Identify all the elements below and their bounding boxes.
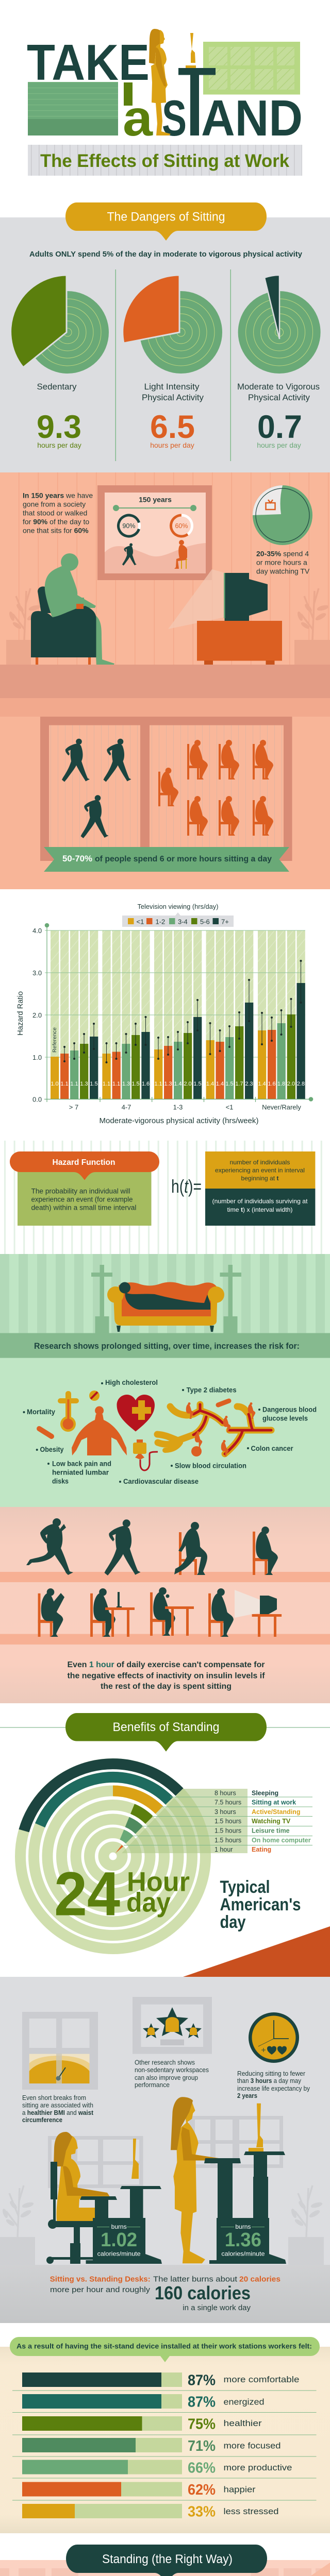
value labels: 2.0 [287, 1081, 295, 1087]
gridlines [45, 930, 305, 1057]
formula: h(t)= [171, 1176, 202, 1197]
ribbon: 50-70 percent [44, 847, 289, 872]
fraction box: time t) x (interval width) [227, 1206, 293, 1213]
risk list: Slow blood circulation [175, 1462, 246, 1469]
text: 150 years: for 90% of the day to [23, 517, 89, 526]
bars [51, 983, 305, 1099]
grave crosses [91, 1265, 241, 1333]
armchair with man [31, 553, 114, 665]
text: calories comparison: in a single work day [183, 2303, 251, 2312]
stat: light intensity [142, 382, 204, 449]
chart columns [51, 930, 305, 1099]
value labels: 1.3 [164, 1081, 172, 1087]
heading: 24 hour day [54, 1859, 190, 1929]
ribbon: 50-70 percent: 50-70% [62, 854, 92, 863]
window block [203, 42, 300, 95]
row: more productive: 66% [188, 2460, 216, 2476]
fraction box: (number of individuals surviving at [212, 1197, 308, 1205]
risk list: disks [52, 1478, 69, 1485]
panel: sit-stand survey [0, 2337, 330, 2533]
title word: a: a [123, 90, 154, 146]
x axis labels: > 7 [69, 1104, 78, 1111]
text: calories comparison [50, 2275, 280, 2312]
panel: benefits of standing [0, 1713, 330, 1977]
definition box [10, 1151, 159, 1226]
x axis labels: 4-7 [122, 1104, 131, 1111]
figure: watching tv [208, 1588, 282, 1637]
risk list: Colon cancer [251, 1445, 293, 1452]
text: group performance: can also improve group [135, 2074, 198, 2081]
section heading: benefits of standing [65, 1713, 267, 1752]
panel: exercise vs sitting [0, 1507, 330, 1703]
value labels: 1.7 [235, 1081, 243, 1087]
stat: standing calories: 1.36 [225, 2229, 261, 2251]
donut: 90 percent [116, 513, 142, 539]
text: calories comparison: The latter burns about [153, 2275, 238, 2283]
legend table [124, 1790, 312, 1853]
figure: running [26, 1518, 73, 1575]
stat: moderate to vigorous: hours per day [257, 441, 301, 449]
text: life expectancy: increase life expectancy by [237, 2085, 310, 2092]
television and stand [168, 569, 282, 665]
stat: light intensity: Light Intensity [144, 382, 200, 392]
sitting figures [158, 740, 273, 836]
row: more focused: 71% [188, 2438, 216, 2454]
stat: standing calories: burns [235, 2223, 251, 2230]
risk list: Low back pain and [52, 1460, 111, 1467]
window with figures [40, 717, 292, 861]
row: more productive [22, 2460, 292, 2476]
y axis labels: 4.0 [32, 927, 42, 935]
icon: capsule [39, 1429, 52, 1436]
risk list: Dangerous blood [262, 1405, 317, 1414]
section heading: standing the right way: Standing (the Right Way) [102, 2552, 233, 2566]
value labels: 1.5 [131, 1081, 140, 1087]
row: more focused [22, 2438, 280, 2454]
value labels: 1.8 [277, 1081, 285, 1087]
stat: moderate to vigorous [237, 382, 320, 449]
donut: 60 percent: 60% [175, 522, 188, 530]
value labels: 1.1 [70, 1081, 78, 1087]
figure: sitting [253, 1527, 278, 1575]
row: more comfortable [22, 2372, 299, 2388]
risk list: Obesity [40, 1446, 64, 1453]
stat: sedentary: hours per day [37, 441, 81, 449]
title word: Stand: S [162, 90, 187, 146]
figure: at computer [90, 1588, 135, 1637]
standing woman [171, 2097, 225, 2263]
definition box: Hazard Function [53, 1158, 116, 1167]
risk list: glucose levels [262, 1415, 308, 1422]
legend table: Sleeping [252, 1790, 278, 1797]
legend table: 3 hours [214, 1808, 236, 1816]
text: short breaks: circumference [22, 2116, 62, 2124]
row: healthier [22, 2416, 262, 2433]
intro sentence: Adults ONLY spend 5% of the day in moderate to vigorous physical activity [29, 250, 302, 259]
text: calories comparison: more per hour and roughly [50, 2285, 151, 2294]
text: group performance: performance [135, 2081, 170, 2089]
row: more comfortable: more comfortable [224, 2375, 299, 2384]
icon: orange body [72, 1406, 127, 1455]
legend table: Active/Standing [252, 1808, 300, 1816]
text: exercise can't compensate: the negative effects of inactivity on insulin levels if [67, 1671, 265, 1681]
panel: hazard function [0, 1141, 330, 1254]
stat: light intensity: hours per day [150, 441, 194, 449]
text: life expectancy: 2 years [237, 2092, 257, 2099]
background windows [48, 2116, 283, 2188]
woman at desk [149, 29, 196, 135]
value labels: 2.0 [184, 1081, 192, 1087]
value labels: 2.3 [245, 1081, 253, 1087]
text: life expectancy [237, 2070, 310, 2099]
heading: typical american's day: day [220, 1912, 246, 1932]
value labels: 2.8 [297, 1081, 305, 1087]
framed picture: 150 years [97, 485, 212, 580]
value labels: 1.4 [174, 1081, 182, 1087]
text: 150 years [23, 492, 93, 535]
donut: 60 percent [167, 511, 196, 540]
text: calories comparison: Sitting vs. Standing Desks: [50, 2275, 151, 2283]
legend table: On home computer [252, 1837, 311, 1844]
text: group performance [135, 2059, 209, 2089]
risk list [23, 1379, 317, 1485]
value labels: 1.1 [103, 1081, 110, 1087]
donut: 90 percent: 90% [122, 522, 136, 530]
standing desk frame [204, 2151, 286, 2264]
stat: sedentary: Sedentary [37, 382, 77, 392]
row: more focused: more focused [224, 2441, 280, 2450]
pie: moderate to vigorous [238, 275, 321, 374]
row: less stressed [22, 2504, 278, 2520]
fraction box [205, 1151, 315, 1226]
chart legend: <1 [136, 918, 144, 925]
x axis labels: <1 [226, 1104, 233, 1111]
icon: tv [266, 500, 275, 510]
heading: typical american's day: Typical [220, 1877, 270, 1897]
text: exercise can't compensate [67, 1660, 265, 1691]
value labels: 1.3 [80, 1081, 88, 1087]
figure: walking [104, 1519, 141, 1575]
text: calories comparison: 160 calories [155, 2282, 251, 2303]
definition box: death) within a small time interval [31, 1204, 136, 1212]
heading: typical american's day: American's [220, 1895, 301, 1914]
row: less stressed: 33% [188, 2504, 216, 2520]
error bars [64, 960, 302, 1063]
reference label: Reference [52, 1027, 58, 1053]
fraction box: experiencing an event in interval [215, 1166, 305, 1174]
text: life expectancy: Reducing sitting to fewer [237, 2070, 305, 2077]
plants [2, 2185, 323, 2237]
survey heading [10, 2337, 320, 2362]
stat: sedentary: 9.3 [37, 409, 81, 445]
stat: standing calories: calories/minute [221, 2250, 265, 2258]
value labels: 1.3 [122, 1081, 130, 1087]
x axis title: Moderate-vigorous physical activity (hrs/week) [99, 1116, 259, 1125]
row: healthier: healthier [224, 2418, 262, 2428]
stat: moderate to vigorous: Physical Activity [248, 393, 310, 402]
heading: 24 hour day: 24 [54, 1859, 120, 1929]
section heading: benefits of standing: Benefits of Standing [112, 1720, 220, 1734]
section heading: standing the right way [66, 2545, 267, 2576]
panel: dangers of sitting [0, 202, 330, 472]
legend table: 8 hours [214, 1790, 236, 1797]
value labels: 1.1 [60, 1081, 69, 1087]
title [27, 29, 303, 176]
stat: sedentary [37, 382, 81, 449]
row: less stressed: less stressed [224, 2506, 278, 2516]
icon: red capsule [218, 1401, 229, 1405]
value labels: 1.1 [112, 1081, 120, 1087]
risk list: High cholesterol [105, 1379, 158, 1386]
fraction box: number of individuals [230, 1159, 290, 1166]
man [45, 553, 114, 665]
value labels: 1.6 [142, 1081, 150, 1087]
scene: standing desk [171, 2097, 286, 2264]
panel: short breaks [22, 2012, 98, 2090]
row: happier: 62% [188, 2482, 216, 2498]
fraction box: beginning at t [241, 1175, 278, 1182]
stat: sitting calories [97, 2223, 141, 2258]
panel: standing the right way [0, 2545, 330, 2576]
chart legend [122, 903, 234, 927]
risk list: Type 2 diabetes [187, 1386, 237, 1394]
text: calories comparison: 20 calories [239, 2275, 280, 2283]
row: energized: energized [224, 2397, 264, 2407]
definition box: experience an event (for example [31, 1195, 133, 1204]
icon: arteries [157, 1404, 271, 1454]
heading: 24 hour day: day [126, 1888, 171, 1918]
stat: moderate to vigorous: Moderate to Vigorous [237, 382, 320, 392]
figure: rising from chair [174, 1522, 207, 1575]
panel: living room [0, 472, 330, 889]
pie: light intensity [123, 275, 222, 374]
chart legend: 3-4 [178, 918, 188, 925]
legend table: Watching TV [252, 1818, 291, 1825]
title word: TAKE: TAKE [27, 34, 150, 91]
legend table: 1.5 hours [214, 1837, 241, 1844]
monitor [256, 2104, 263, 2147]
sitting woman [54, 2132, 109, 2221]
figure: reading [38, 1588, 64, 1637]
title word: Stand [162, 68, 303, 146]
row: happier [22, 2482, 256, 2498]
legend table: Sitting at work [252, 1799, 296, 1806]
row: energized [22, 2394, 264, 2410]
radial chart: 24 hour day [21, 1764, 248, 1948]
row: healthier: 75% [188, 2416, 216, 2433]
chair [46, 2162, 95, 2264]
row: energized: 87% [188, 2394, 216, 2410]
figure: eating at table [150, 1587, 194, 1636]
subtitle band [28, 145, 302, 176]
stat: sitting calories: calories/minute [97, 2250, 141, 2258]
y axis labels: 3.0 [32, 969, 42, 977]
risk list: Mortality [27, 1408, 55, 1416]
y axis labels: 0.0 [32, 1095, 42, 1104]
risk list: herniated lumbar [52, 1468, 109, 1477]
legend table: 1.5 hours [214, 1827, 241, 1834]
icon: iv bag [133, 1439, 158, 1470]
value labels: 1.5 [225, 1081, 234, 1087]
bar chart: hazard ratio [16, 903, 313, 1125]
heading: typical american's day [220, 1877, 301, 1932]
icon: pill [89, 1391, 100, 1401]
text: tv watching [256, 549, 310, 575]
walking figures [62, 739, 131, 838]
panel: group performance [133, 1997, 212, 2054]
text: short breaks [22, 2094, 94, 2124]
value labels: 1.1 [154, 1081, 162, 1087]
value labels: 1.4 [216, 1081, 224, 1087]
survey heading: As a result of having the sit-stand device installed at their work stations workers felt: [16, 2342, 312, 2350]
text: 150 years: gone from a society [23, 500, 86, 508]
legend table: 1 hour [214, 1846, 233, 1853]
band: research shows: Research shows prolonged sitting, over time, increases the risk for: [34, 1342, 300, 1351]
icons: small sitters on arteries [186, 1402, 255, 1456]
legend table: Leisure time [252, 1827, 290, 1834]
chart legend: 7+ [221, 918, 229, 925]
framed picture: 150 years: 150 years [139, 496, 172, 504]
monitor [131, 2139, 139, 2179]
ribbon: 50-70 percent: of people spend 6 or more hours sitting a day [95, 855, 272, 863]
text: tv watching: or more hours a [256, 558, 307, 567]
value labels [51, 1081, 305, 1087]
green striped block [28, 82, 118, 135]
stat: light intensity: 6.5 [150, 409, 195, 445]
plants [9, 588, 329, 640]
text: life expectancy: than 3 hours a day may [237, 2077, 302, 2084]
value labels: 1.6 [268, 1081, 276, 1087]
legend table: 1.5 hours [214, 1818, 241, 1825]
icon: snack cup [76, 598, 84, 609]
text: short breaks: Even short breaks from [22, 2094, 86, 2102]
icon: thermometer cross [58, 1391, 79, 1432]
section heading: the dangers of sitting: The Dangers of Sitting [107, 210, 225, 224]
axes [44, 923, 313, 1102]
text: group performance: non-sedentary workspaces [135, 2066, 209, 2074]
section heading: the dangers of sitting [65, 202, 267, 241]
text: short breaks: a healthier BMI and waist [22, 2109, 94, 2116]
chart legend: 5-6 [200, 918, 210, 925]
text: short breaks: sitting are associated with [22, 2102, 93, 2109]
text: 150 years: that stood or walked [23, 509, 87, 517]
band: research shows [0, 1333, 330, 1358]
text: tv watching: 20-35% spend 4 [256, 549, 309, 557]
y axis labels: 1.0 [32, 1054, 42, 1061]
risk list: Cardiovascular disease [123, 1478, 199, 1485]
subtitle band: The Effects of Sitting at Work [40, 151, 290, 171]
text: tv watching: day watching TV [256, 567, 310, 575]
icon: clock with hearts [249, 2012, 299, 2063]
chart legend: 1-2 [156, 918, 165, 925]
legend table: 7.5 hours [214, 1799, 241, 1806]
value labels: 1.5 [90, 1081, 98, 1087]
text: group performance: Other research shows [135, 2059, 195, 2066]
icon: sitting person [174, 540, 187, 569]
value labels: 1.4 [206, 1081, 214, 1087]
text: 150 years: one that sits for 60% [23, 527, 89, 535]
timeline [113, 505, 196, 511]
definition box: The probability an individual will [31, 1187, 130, 1195]
y axis title: Hazard Ratio [16, 991, 25, 1036]
stat: standing calories [221, 2223, 265, 2258]
chart legend: Television viewing (hrs/day) [137, 903, 219, 910]
stat: sitting calories: 1.02 [101, 2229, 137, 2251]
desk [80, 2186, 162, 2264]
value labels: 1.0 [51, 1081, 59, 1087]
row: happier: happier [224, 2484, 256, 2495]
scene: sitting desk [46, 2132, 162, 2264]
pie: sedentary [11, 275, 109, 374]
background windows [0, 2568, 330, 2576]
y axis labels: 2.0 [32, 1011, 42, 1019]
heading: 24 hour day: Hour [127, 1867, 190, 1897]
value labels: 1.5 [193, 1081, 202, 1087]
text: exercise can't compensate: the rest of the day is spent sitting [101, 1682, 232, 1691]
panel: sitting vs standing desks [0, 1977, 330, 2323]
row: more productive: more productive [224, 2463, 292, 2472]
row: more comfortable: 87% [188, 2372, 216, 2388]
stat: moderate to vigorous: 0.7 [257, 409, 302, 445]
stat: light intensity: Physical Activity [142, 393, 204, 402]
icon: ball [191, 1446, 202, 1456]
value labels: 1.4 [258, 1081, 266, 1087]
text: exercise can't compensate: Even 1 hour of daily exercise can't compensate for [67, 1660, 265, 1669]
text: 150 years: In 150 years we have [23, 492, 93, 500]
x axis labels: 1-3 [173, 1104, 183, 1111]
panel: health risks [0, 1254, 330, 1507]
x axis labels: Never/Rarely [262, 1104, 301, 1111]
stat: sitting calories: burns [111, 2223, 127, 2230]
y axis labels [32, 927, 42, 1104]
legend table: Eating [252, 1846, 271, 1853]
icon: heart [117, 1395, 155, 1431]
clock pie: tv watching [253, 485, 312, 545]
icon: walking person [122, 543, 137, 566]
x axis labels [69, 1104, 301, 1111]
couch with person [107, 1282, 224, 1332]
title word: Stand: AND [201, 90, 303, 146]
